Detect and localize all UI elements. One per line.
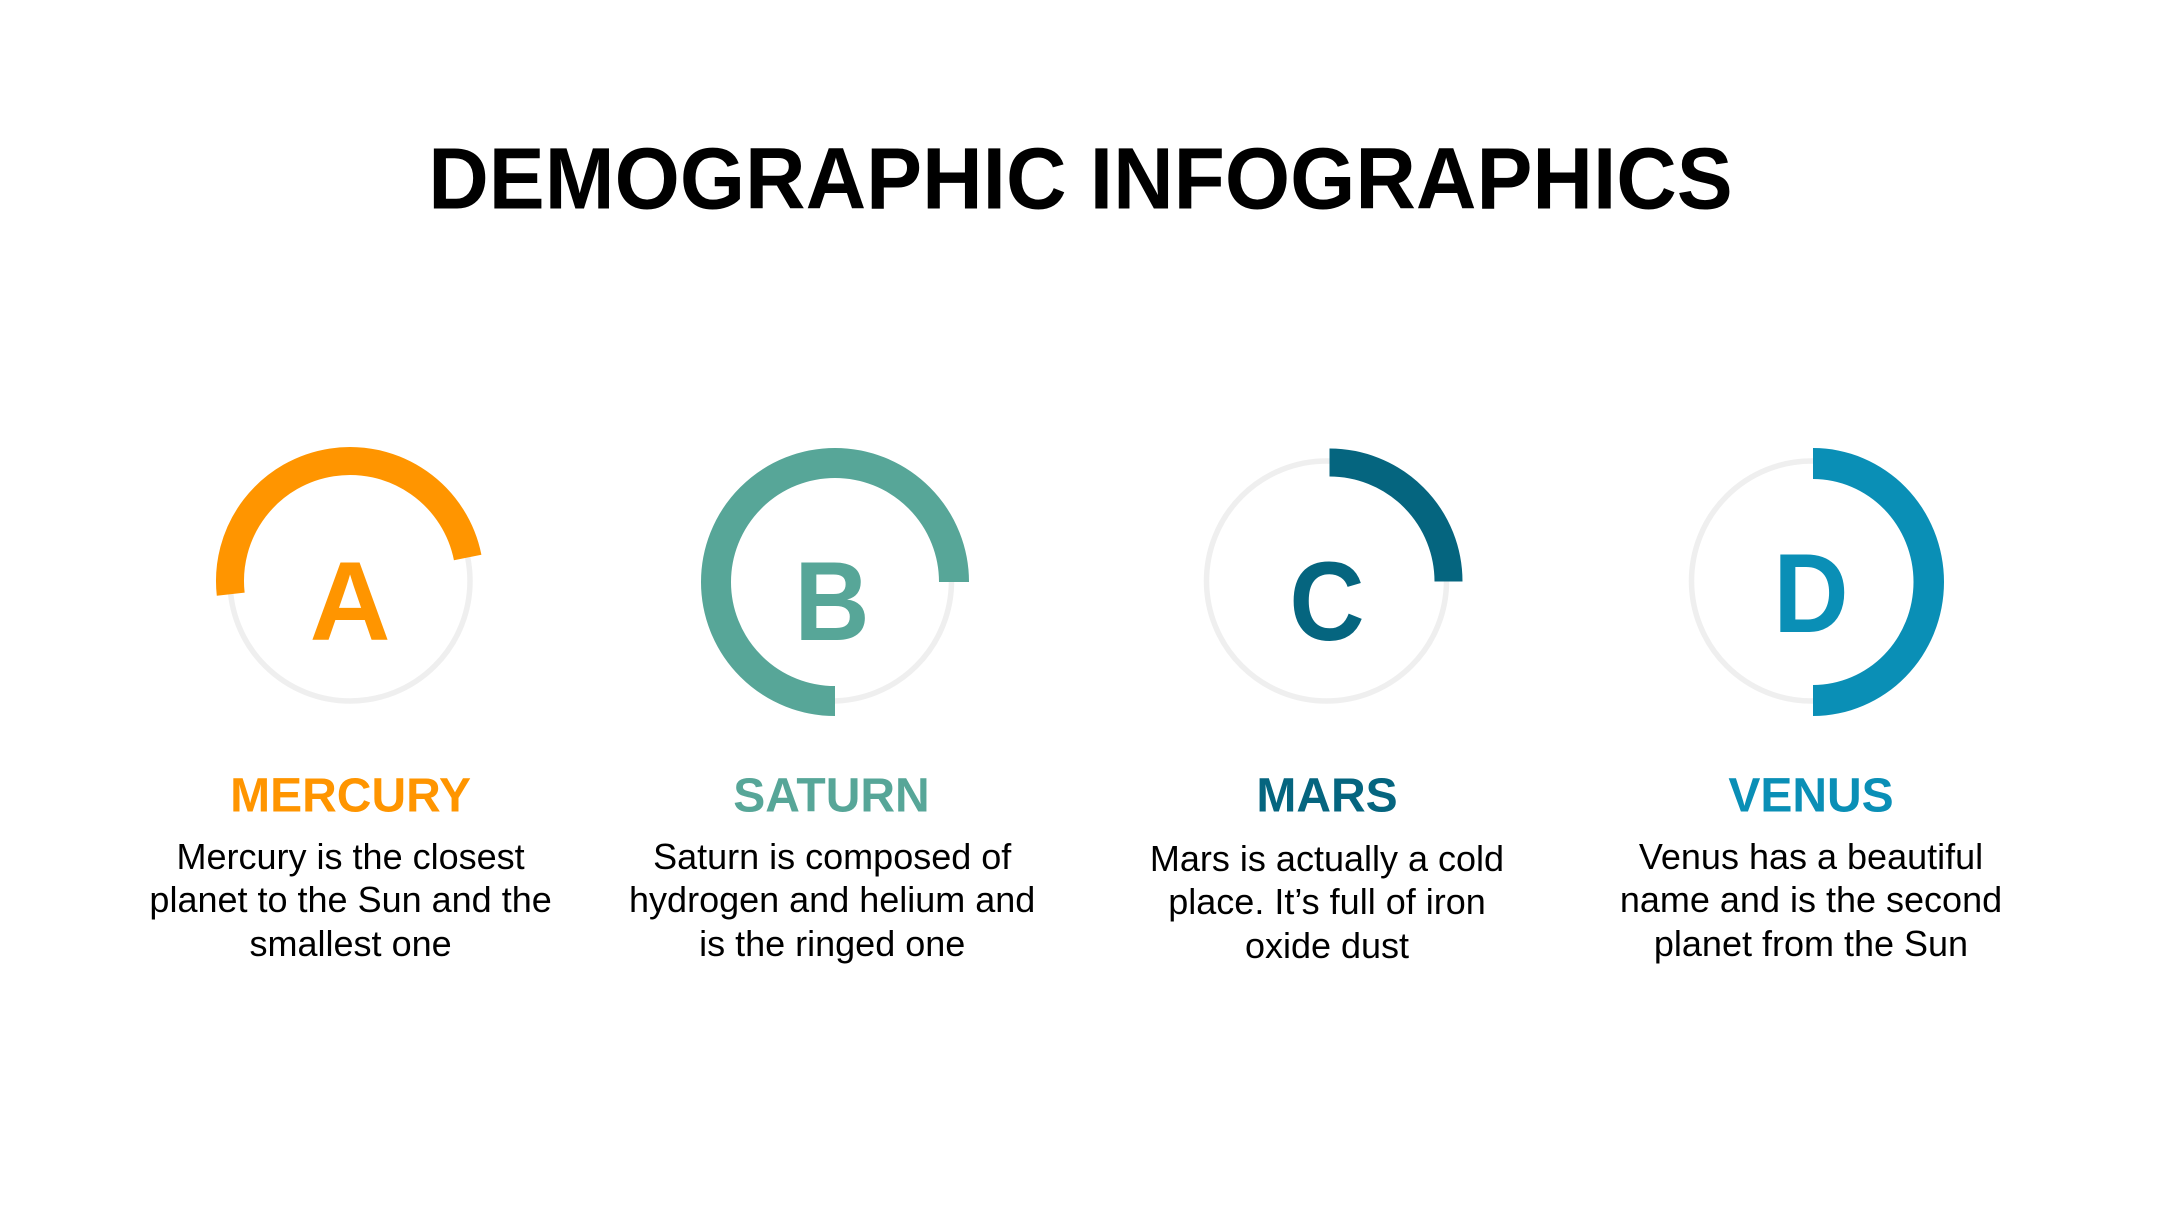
description: Mars: Mars is actually a cold <box>1150 838 1504 879</box>
panel: Mercury <box>149 461 552 964</box>
gauge: Venus ring <box>1692 448 1944 716</box>
heading: Venus: VENUS <box>1728 770 1894 822</box>
panel: Venus <box>1620 448 2002 964</box>
description: Mars <box>1150 838 1504 966</box>
description: Saturn <box>629 836 1035 964</box>
description: Venus: name and is the second <box>1620 879 2002 920</box>
description: Mercury: planet to the Sun and the <box>149 879 552 920</box>
panel: Mars <box>1150 461 1504 966</box>
description: Mercury: Mercury is the closest <box>177 836 525 877</box>
heading: Mars: MARS <box>1256 770 1398 822</box>
heading: Saturn: SATURN <box>733 770 930 822</box>
description: Saturn: hydrogen and helium and <box>629 879 1035 920</box>
gauge: Mars ring <box>1206 461 1448 701</box>
description: Venus: planet from the Sun <box>1654 923 1968 964</box>
gauge: Saturn ring <box>712 461 954 701</box>
letter D: D <box>1773 531 1849 656</box>
letter A: A <box>310 539 390 664</box>
description: Mars: place. It’s full of iron <box>1168 881 1486 922</box>
description: Mars: oxide dust <box>1245 925 1409 966</box>
description: Venus: Venus has a beautiful <box>1639 836 1983 877</box>
heading: Mercury: MERCURY <box>230 770 471 822</box>
description: Mercury <box>149 836 552 964</box>
gauge: Mercury ring <box>230 461 470 701</box>
letter B: B <box>794 539 870 664</box>
description: Venus <box>1620 836 2002 964</box>
panel: Saturn <box>629 461 1035 964</box>
letter C: C <box>1289 539 1365 664</box>
description: Saturn: is the ringed one <box>699 923 965 964</box>
description: Saturn: Saturn is composed of <box>653 836 1012 877</box>
description: Mercury: smallest one <box>250 923 452 964</box>
title: DEMOGRAPHIC INFOGRAPHICS <box>428 131 1733 228</box>
